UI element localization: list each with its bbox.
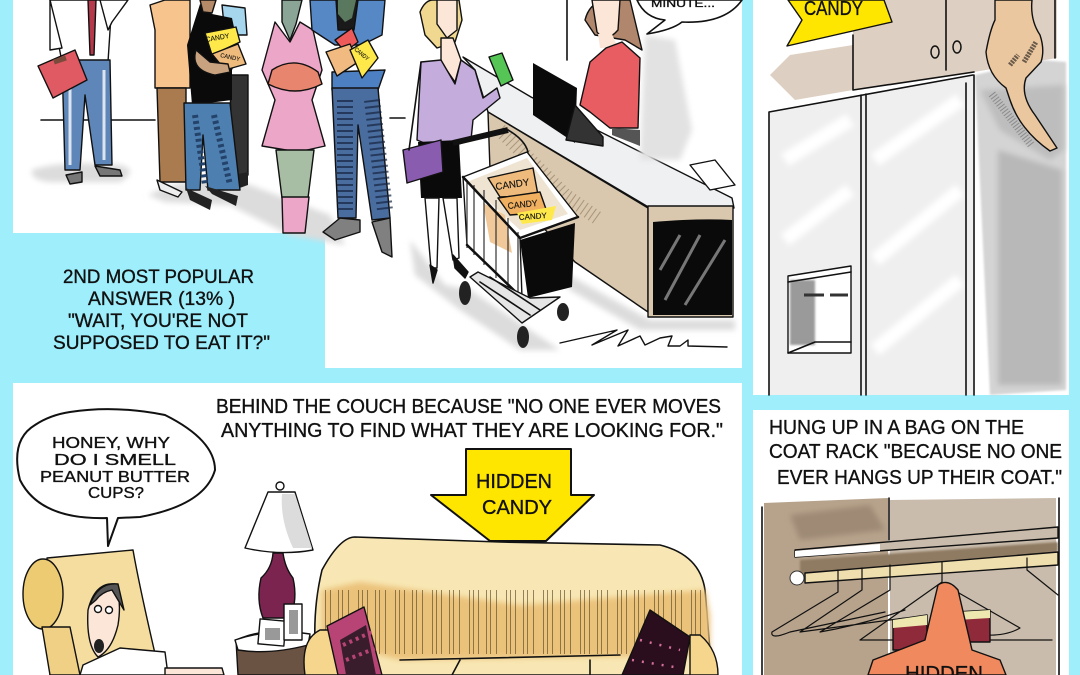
side table with photo frames — [235, 604, 310, 675]
cash register monitor — [533, 63, 603, 146]
speech bubble: minute — [637, 0, 742, 34]
cat on fridge — [986, 0, 1057, 151]
shopping cart with candy: CANDY — [519, 211, 548, 222]
wire hangers — [772, 558, 1058, 640]
hanging orange bag — [868, 582, 1006, 675]
text: second most popular answer — [53, 267, 270, 354]
shopping cart with candy: CANDY — [495, 177, 530, 193]
signature — [560, 330, 727, 347]
frankenstein monster in blue: CANDY — [353, 47, 370, 62]
speech bubble: peanut butter cups: HONEY, WHY — [52, 435, 170, 452]
woman paying with cash — [403, 0, 513, 283]
text: second most popular answer: ANSWER (13% ) — [88, 289, 235, 310]
speech bubble: peanut butter cups: CUPS? — [88, 485, 144, 502]
arrow: hidden candy behind couch: CANDY — [482, 497, 552, 519]
kitchen cabinets — [770, 0, 1057, 100]
panel: behind the couch — [13, 383, 742, 675]
recliner and man — [23, 550, 224, 675]
caption: coat rack — [769, 417, 1062, 489]
panel: refrigerator with cat — [753, 0, 1069, 395]
closet shelf and rod — [790, 527, 1058, 585]
caption: behind the couch: ANYTHING TO FIND WHAT THEY ARE LOOKING FOR." — [221, 420, 723, 442]
shopping cart with candy — [453, 130, 578, 348]
text: second most popular answer: SUPPOSED TO EAT IT?" — [53, 333, 270, 354]
closet wall — [762, 498, 1059, 675]
person in orange shirt — [150, 0, 190, 197]
man with red folder — [38, 0, 128, 184]
shopping cart with candy: CANDY — [507, 198, 538, 211]
text: second most popular answer: 2ND MOST POPULAR — [63, 267, 254, 288]
floor shadows — [32, 163, 735, 350]
man in black t-shirt with candy — [184, 0, 246, 210]
speech bubble: peanut butter cups: DO I SMELL — [54, 452, 176, 469]
checkout counter — [463, 57, 735, 317]
speech bubble: peanut butter cups: PEANUT BUTTER — [40, 469, 190, 486]
zombie woman in pink — [262, 0, 325, 233]
caption: coat rack: COAT RACK "BECAUSE NO ONE — [769, 441, 1062, 463]
person in blue shirt behind — [222, 5, 248, 190]
man in black t-shirt with candy: CANDY — [220, 53, 240, 63]
refrigerator — [769, 60, 1066, 395]
caption: behind the couch: BEHIND THE COUCH BECAUSE "NO ONE EVER MOVES — [216, 396, 721, 418]
man in black t-shirt with candy: CANDY — [205, 33, 230, 44]
frankenstein monster in blue — [310, 0, 392, 257]
speech bubble: peanut butter cups — [17, 409, 215, 546]
panel: coat rack — [753, 410, 1069, 675]
caption: coat rack: HUNG UP IN A BAG ON THE — [769, 417, 1024, 439]
table lamp — [245, 482, 313, 618]
throw pillows — [327, 607, 690, 675]
text: second most popular answer: "WAIT, YOU'RE NOT — [68, 311, 248, 332]
arrow: hidden candy on top — [787, 0, 892, 46]
caption: coat rack: EVER HANGS UP THEIR COAT." — [777, 467, 1062, 489]
caption: behind the couch — [216, 396, 723, 442]
couch — [304, 537, 718, 675]
cashier — [567, 0, 692, 160]
arrow: hidden candy behind couch: HIDDEN — [476, 471, 552, 493]
panel: checkout line cartoon — [13, 0, 742, 368]
arrow: hidden candy behind couch — [431, 449, 594, 541]
